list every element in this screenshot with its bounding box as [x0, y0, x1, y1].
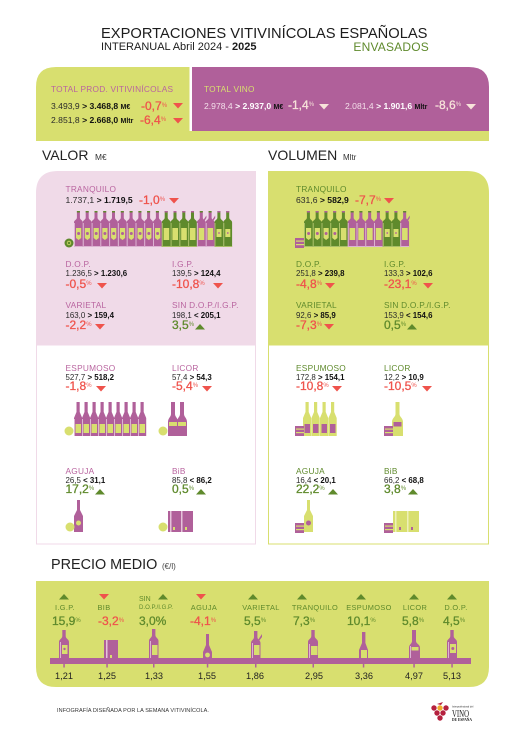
title: INTERANUAL Abril 2024 - 2025 — [101, 41, 257, 53]
item: aguja — [190, 594, 217, 681]
item: tranquilo — [292, 594, 338, 681]
licor volumen: LICOR — [384, 363, 411, 373]
aguja valor: AGUJA — [66, 466, 95, 476]
item: licor: 5,8 — [402, 614, 419, 628]
sin d.o.p. volumen: 0,5 — [384, 318, 401, 332]
item: varietal: VARIETAL — [242, 603, 280, 612]
licor valor: LICOR — [172, 363, 199, 373]
item: i.g.p.: 15,9 — [52, 614, 75, 628]
aguja volumen: 22,2 — [296, 482, 319, 496]
varietal valor: -2,2 — [66, 318, 86, 332]
item: espumoso: 3,36 — [355, 671, 373, 681]
item: sin d.o.p./i.g.p.: SIN — [139, 596, 151, 603]
aguja valor: 26,5 < 31,1 — [66, 476, 106, 485]
item: varietal: 5,5 — [244, 614, 261, 628]
tranquilo valor: TRANQUILO — [66, 184, 116, 194]
aguja volumen — [295, 466, 338, 533]
item: d.o.p. — [443, 594, 468, 681]
item: aguja: AGUJA — [191, 603, 217, 612]
tranquilo valor: 1.737,1 > 1.719,5 — [66, 195, 133, 205]
d.o.p. valor — [66, 259, 128, 291]
espumoso valor — [64, 363, 146, 436]
i.g.p. valor: 139,5 > 124,4 — [172, 269, 221, 278]
panel: total producto: 3.493,9 > 3.468,8 M€ — [51, 101, 130, 111]
heading: precio medio: (€/l) — [162, 562, 176, 571]
d.o.p. volumen — [296, 259, 345, 291]
i.g.p. volumen: I.G.P. — [384, 259, 406, 269]
item: aguja: -4,1 — [190, 614, 211, 628]
item: aguja: % — [211, 618, 217, 624]
item: bib: BIB — [98, 603, 110, 612]
panel: total producto — [36, 67, 200, 141]
icon: bottles tranquilo volumen — [295, 211, 410, 248]
sin d.o.p. valor: 198,1 < 205,1 — [172, 311, 221, 320]
item: licor: 4,97 — [405, 671, 423, 681]
bib valor: % — [189, 486, 195, 492]
panel: total producto: TOTAL PROD. VITIVINÍCOLAS — [51, 84, 173, 94]
panel: total vino: 2.081,4 > 1.901,6 Mltr — [345, 101, 428, 111]
panel: precio medio — [36, 581, 489, 687]
item: d.o.p.: 5,13 — [443, 671, 461, 681]
sin d.o.p. volumen — [384, 300, 451, 332]
varietal valor: % — [86, 322, 92, 328]
tranquilo volumen: -7,7 — [355, 193, 376, 207]
item: sin d.o.p./i.g.p.: D.O.P./I.G.P. — [139, 604, 173, 611]
licor volumen — [384, 363, 432, 436]
item: d.o.p.: % — [460, 618, 466, 624]
title: EXPORTACIONES VITIVINÍCOLAS ESPAÑOLAS — [101, 25, 428, 42]
i.g.p. valor: I.G.P. — [172, 259, 194, 269]
panel: total vino: -1,4 — [288, 98, 309, 112]
bib valor: BiB — [172, 466, 186, 476]
sin d.o.p. volumen: SIN D.O.P./I.G.P. — [384, 300, 451, 310]
tranquilo volumen: 631,6 > 582,9 — [296, 195, 349, 205]
sin d.o.p. volumen: % — [401, 322, 407, 328]
tranquilo volumen: % — [376, 197, 382, 203]
item: espumoso: % — [370, 618, 376, 624]
sin d.o.p. valor: SIN D.O.P./I.G.P. — [172, 300, 239, 310]
bib volumen: 3,8 — [384, 482, 401, 496]
aguja valor: 17,2 — [66, 482, 89, 496]
heading: valor: VALOR — [42, 147, 88, 163]
item: i.g.p. — [52, 594, 81, 681]
item: varietal — [242, 594, 280, 681]
bib valor: 0,5 — [172, 482, 189, 496]
espumoso valor: % — [86, 383, 92, 389]
i.g.p. volumen: -23,1 — [384, 277, 411, 291]
title — [101, 25, 429, 54]
tranquilo valor: -1,0 — [139, 193, 160, 207]
tranquilo valor: % — [160, 197, 166, 203]
item: bib: -3,2 — [98, 614, 119, 628]
item: varietal: 1,86 — [246, 671, 264, 681]
item: sin d.o.p./i.g.p.: 1,33 — [145, 671, 163, 681]
item: espumoso: ESPUMOSO — [346, 603, 392, 612]
varietal volumen: VARIETAL — [296, 300, 337, 310]
panel: total vino: TOTAL VINO — [204, 84, 255, 94]
espumoso volumen: % — [323, 383, 329, 389]
licor volumen: -10,5 — [384, 379, 411, 393]
espumoso valor: ESPUMOSO — [66, 363, 116, 373]
aguja valor: % — [89, 486, 95, 492]
item: d.o.p.: D.O.P. — [444, 603, 468, 612]
tranquilo valor — [66, 184, 179, 207]
panel: volumen — [268, 171, 489, 544]
panel: total producto: % — [162, 103, 168, 109]
item: espumoso — [346, 594, 392, 681]
panel: total producto: 2.851,8 > 2.668,0 Mltr — [51, 115, 134, 125]
item: aguja: 1,55 — [198, 671, 216, 681]
varietal volumen: % — [317, 322, 323, 328]
panel: total vino: % — [309, 102, 315, 108]
d.o.p. volumen: 251,8 > 239,8 — [296, 269, 345, 278]
sin d.o.p. volumen: 153,9 < 154,6 — [384, 311, 433, 320]
item: licor: LICOR — [403, 603, 427, 612]
d.o.p. valor: D.O.P. — [66, 259, 91, 269]
price axis bar — [50, 658, 471, 664]
item: tranquilo: TRANQUILO — [292, 603, 338, 612]
bib valor: 85,8 < 86,2 — [172, 476, 212, 485]
i.g.p. volumen: 133,3 > 102,6 — [384, 269, 433, 278]
heading: valor: M€ — [95, 152, 107, 162]
item: licor: % — [419, 618, 425, 624]
varietal volumen: -7,3 — [296, 318, 317, 332]
item: i.g.p.: 1,21 — [55, 671, 73, 681]
espumoso volumen: ESPUMOSO — [296, 363, 346, 373]
item: sin d.o.p./i.g.p.: 3,0% — [139, 614, 167, 628]
panel: total producto: -6,4 — [140, 113, 161, 127]
licor volumen: % — [411, 383, 417, 389]
i.g.p. volumen: % — [411, 281, 417, 287]
panel: total producto: % — [161, 117, 167, 123]
tranquilo volumen: TRANQUILO — [296, 184, 347, 194]
item: espumoso: 10,1 — [347, 614, 370, 628]
item: bib: % — [119, 618, 125, 624]
espumoso valor: -1,8 — [66, 379, 86, 393]
licor valor: % — [193, 383, 199, 389]
espumoso volumen: 172,8 > 154,1 — [296, 373, 345, 382]
bib volumen — [384, 466, 424, 533]
heading: volumen: VOLUMEN — [268, 147, 337, 163]
icon: bottles tranquilo valor — [64, 211, 232, 248]
heading: volumen: Mltr — [343, 153, 357, 162]
item: bib: 1,25 — [98, 671, 116, 681]
i.g.p. volumen — [384, 259, 433, 291]
sin d.o.p. valor — [172, 300, 239, 332]
bib volumen: % — [401, 486, 407, 492]
item: tranquilo: % — [310, 618, 316, 624]
item: bib — [98, 594, 125, 681]
varietal volumen: 92,6 > 85,9 — [296, 311, 336, 320]
item: tranquilo: 7,3 — [293, 614, 310, 628]
panel: total producto: -0,7 — [141, 99, 162, 113]
item: varietal: % — [261, 618, 267, 624]
aguja volumen: 16,4 < 20,1 — [296, 476, 336, 485]
item: i.g.p.: I.G.P. — [55, 603, 75, 612]
i.g.p. valor: % — [199, 281, 205, 287]
logo: vino de españa: DE ESPAÑA — [452, 717, 472, 722]
espumoso volumen: -10,8 — [296, 379, 323, 393]
aguja valor — [66, 466, 106, 532]
panel: valor — [36, 171, 256, 544]
licor volumen: 12,2 > 10,9 — [384, 373, 424, 382]
item: i.g.p.: % — [75, 618, 81, 624]
d.o.p. valor: 1.236,5 > 1.230,6 — [66, 269, 128, 278]
d.o.p. valor: -0,5 — [66, 277, 86, 291]
aguja volumen: AGUJA — [296, 466, 325, 476]
panel: total vino: -8,6 — [435, 98, 456, 112]
licor valor: -5,4 — [172, 379, 193, 393]
tranquilo volumen — [296, 184, 394, 207]
varietal valor — [66, 300, 115, 332]
sin d.o.p. valor: % — [189, 322, 195, 328]
d.o.p. volumen: % — [317, 281, 323, 287]
title: ENVASADOS — [353, 40, 429, 54]
licor valor — [158, 363, 212, 436]
logo: vino de españa: Interprofesional del — [452, 706, 474, 708]
logo: vino de españa: VINO — [452, 708, 469, 720]
heading: precio medio: PRECIO MEDIO — [51, 557, 157, 573]
panel: total vino: % — [456, 102, 462, 108]
item: d.o.p.: 4,5 — [443, 614, 460, 628]
varietal volumen — [296, 300, 337, 332]
panel: total vino — [190, 67, 489, 141]
item: tranquilo: 2,95 — [305, 671, 323, 681]
aguja volumen: % — [319, 486, 325, 492]
varietal valor: 163,0 > 159,4 — [66, 311, 115, 320]
d.o.p. volumen: -4,8 — [296, 277, 317, 291]
item: sin d.o.p./i.g.p. — [139, 594, 173, 681]
varietal valor: VARIETAL — [66, 300, 107, 310]
bib valor — [158, 466, 212, 532]
espumoso volumen — [295, 363, 346, 436]
i.g.p. valor: -10,8 — [172, 277, 199, 291]
bib volumen: 66,2 < 68,8 — [384, 476, 424, 485]
i.g.p. valor — [172, 259, 223, 291]
bib volumen: BiB — [384, 466, 398, 476]
panel: total vino: 2.978,4 > 2.937,0 M€ — [204, 101, 283, 111]
licor valor: 57,4 > 54,3 — [172, 373, 212, 382]
item: licor — [402, 594, 427, 681]
d.o.p. volumen: D.O.P. — [296, 259, 321, 269]
d.o.p. valor: % — [86, 281, 92, 287]
espumoso valor: 527,7 > 518,2 — [66, 373, 115, 382]
footer credit: INFOGRAFÍA DISEÑADA POR LA SEMANA VITIVINÍCOLA. — [57, 707, 209, 714]
sin d.o.p. valor: 3,5 — [172, 318, 189, 332]
logo: vino de españa — [431, 702, 474, 722]
